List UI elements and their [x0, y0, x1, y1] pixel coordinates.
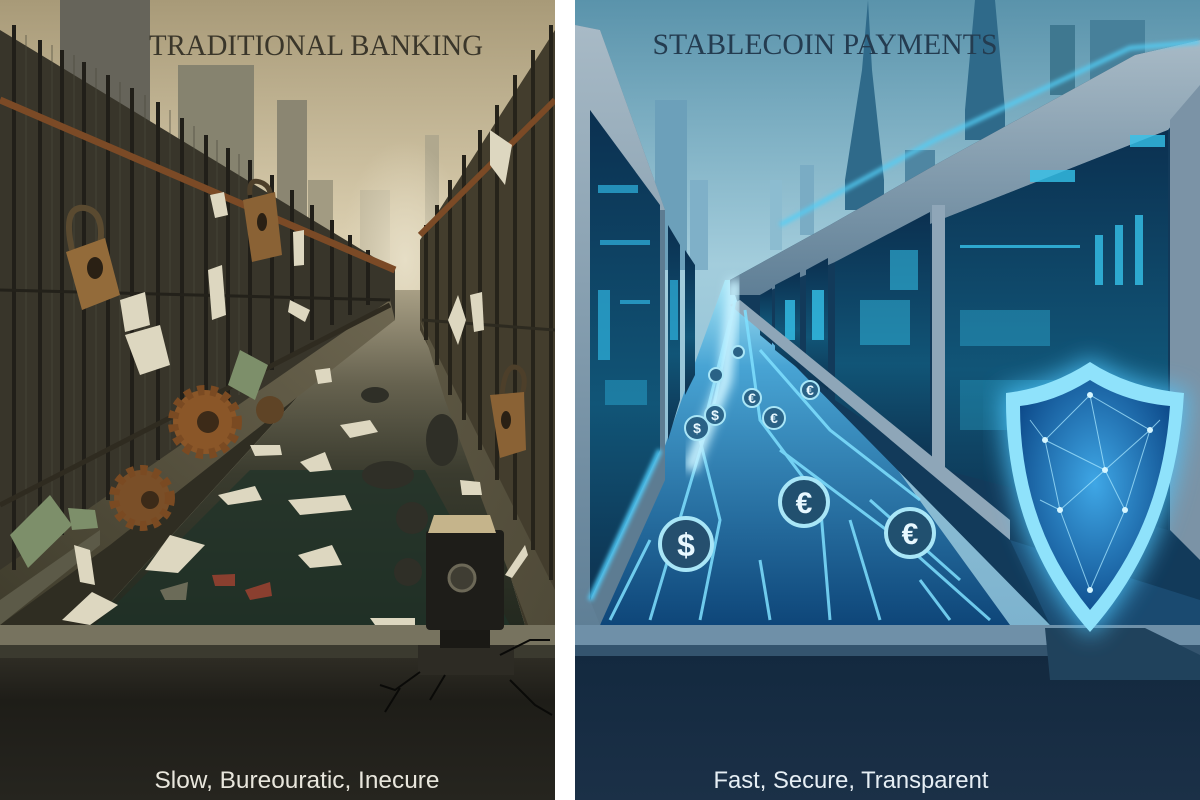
coin: euro large — [780, 478, 828, 526]
coin: dollar large: $ — [677, 527, 695, 563]
floor cracks — [380, 640, 552, 715]
safe — [418, 515, 514, 658]
futuristic skyline — [655, 0, 1145, 270]
gears — [114, 390, 284, 526]
coin: euro: € — [902, 518, 919, 551]
panel: traditional banking — [0, 0, 555, 800]
shield pedestal — [1045, 628, 1200, 680]
floor — [575, 656, 1200, 800]
background buildings — [60, 0, 439, 260]
small coins: $ — [693, 420, 701, 436]
left wall frame — [575, 25, 695, 625]
circuit traces — [610, 300, 990, 620]
small coins: $ — [711, 407, 719, 423]
bottom ledge — [575, 625, 1200, 647]
left fence — [0, 25, 395, 625]
bottom ledge — [0, 625, 555, 647]
floor edge of right wall — [730, 300, 1010, 540]
scattered papers and cash — [62, 130, 528, 632]
wall bases under the fences — [0, 396, 528, 625]
debris on road — [361, 387, 458, 586]
coin: euro — [886, 509, 934, 557]
small coins: € — [770, 410, 778, 426]
icon: security shield — [1002, 358, 1188, 637]
floor — [0, 658, 555, 800]
right fence — [420, 25, 555, 630]
caption: stablecoin: Fast, Secure, Transparent — [714, 767, 989, 794]
heading: traditional banking: TRADITIONAL BANKING — [149, 29, 483, 62]
coins — [660, 346, 934, 570]
heading: stablecoin payments: STABLECOIN PAYMENTS — [652, 28, 998, 61]
panel: stablecoin payments — [575, 0, 1200, 800]
glowing road — [600, 280, 1010, 625]
small coins: € — [806, 382, 814, 398]
small coins: € — [748, 390, 756, 406]
padlocks — [66, 181, 526, 458]
coin: dollar large — [660, 518, 712, 570]
caption: traditional: Slow, Bureouratic, Inecure — [154, 767, 439, 794]
small coins — [685, 346, 819, 440]
right wall frame — [730, 40, 1200, 625]
coin: euro large: € — [796, 487, 813, 520]
road — [90, 290, 525, 625]
